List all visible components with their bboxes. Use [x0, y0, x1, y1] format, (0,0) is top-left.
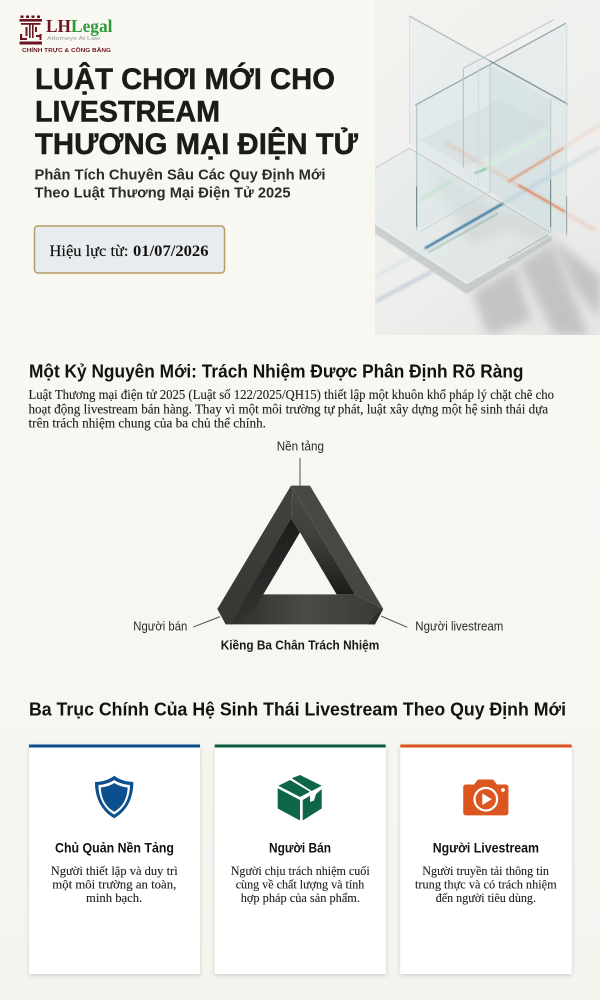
subtitle: Theo Luật Thương Mại Điện Tử 2025	[34, 184, 290, 202]
photo: glass panels	[375, 0, 600, 335]
card text: trung thực và có trách nhiệm	[415, 877, 557, 892]
subtitle	[34, 166, 326, 202]
logo: LHLegal: Attorneys At Law	[47, 36, 100, 42]
logo: LHLegal: Legal	[71, 16, 113, 36]
label: platform: Nền tảng	[277, 440, 324, 454]
logo: LHLegal	[20, 16, 113, 54]
card text: đến người tiêu dùng.	[436, 890, 536, 905]
intro paragraph: trên trách nhiệm chung của ba chủ thể chính.	[28, 416, 266, 430]
icon: package box	[278, 775, 322, 820]
intro paragraph: hoạt động livestream bán hàng. Thay vì một môi trường tự phát, luật xây dựng một hệ sinh thái dựa	[28, 401, 548, 416]
card text	[415, 863, 557, 905]
card text: một môi trường an toàn,	[52, 877, 176, 892]
panel: platform operator	[29, 744, 200, 974]
title: LIVESTREAM	[35, 96, 220, 128]
intro paragraph	[28, 387, 554, 430]
panel: livestreamer	[400, 744, 572, 974]
card text: Người thiết lập và duy trì	[51, 863, 178, 878]
heading: three pillars: Ba Trục Chính Của Hệ Sinh Thái Livestream Theo Quy Định Mới	[29, 699, 566, 720]
icon: camera with play button	[463, 780, 508, 815]
icon: shield	[95, 776, 133, 818]
effective date badge: Hiệu lực từ:	[50, 243, 128, 260]
impossible triangle	[217, 486, 383, 624]
card text: Người truyền tải thông tin	[422, 863, 549, 878]
intro paragraph: Luật Thương mại điện tử 2025 (Luật số 122/2025/QH15) thiết lập một khuôn khổ pháp lý chặt chẽ cho	[28, 387, 554, 402]
card title: Chủ Quản Nền Tảng	[55, 841, 174, 856]
card text	[51, 863, 178, 905]
effective date badge: 01/07/2026	[133, 243, 208, 260]
card text: cùng về chất lượng và tính	[236, 877, 365, 892]
card text: Người chịu trách nhiệm cuối	[231, 863, 370, 878]
card title: Người Livestream	[433, 841, 539, 856]
diagram caption: Kiềng Ba Chân Trách Nhiệm	[221, 638, 379, 652]
logo icon	[20, 16, 42, 44]
subtitle: Phân Tích Chuyên Sâu Các Quy Định Mới	[34, 166, 326, 184]
card text	[231, 863, 370, 905]
title: LUẬT CHƠI MỚI CHO	[35, 62, 335, 96]
connector lines	[193, 458, 407, 627]
logo wordmark: LH	[46, 16, 71, 36]
heading: new era: Một Kỷ Nguyên Mới: Trách Nhiệm Được Phân Định Rõ Ràng	[29, 361, 524, 382]
panel: seller	[215, 744, 386, 974]
label: seller: Người bán	[133, 620, 187, 634]
logo: LHLegal: CHÍNH TRỰC & CÔNG BẰNG	[22, 46, 112, 54]
diagram: three-legged responsibility triangle	[133, 440, 503, 652]
card title: Người Bán	[269, 841, 331, 856]
effective date badge	[34, 226, 224, 273]
label: livestreamer: Người livestream	[415, 620, 503, 634]
card text: minh bạch.	[86, 890, 142, 905]
title: THƯƠNG MẠI ĐIỆN TỬ	[35, 127, 359, 161]
title	[35, 62, 359, 161]
card text: hợp pháp của sản phẩm.	[241, 890, 360, 905]
